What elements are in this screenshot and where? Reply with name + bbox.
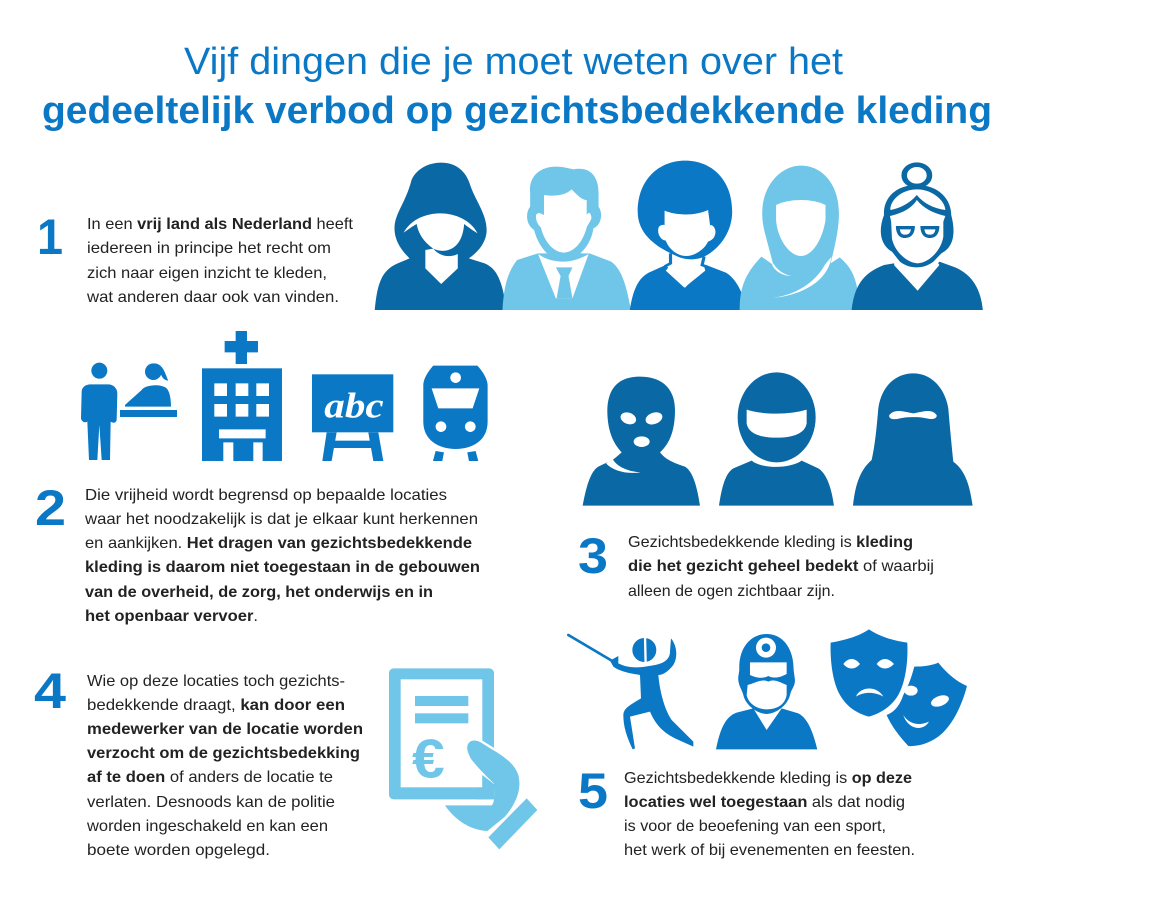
section 4: number: 4 bbox=[34, 663, 66, 719]
person: older woman with glasses bbox=[852, 165, 983, 310]
section 4: text: bedekkende draagt, kan door een bbox=[87, 697, 345, 714]
document: € bbox=[412, 727, 445, 789]
icon: surgeon with mask bbox=[716, 634, 817, 749]
section 4: text: af te doen of anders de locatie te bbox=[87, 769, 333, 786]
person: man in suit bbox=[502, 167, 631, 310]
icon: fencer bbox=[568, 635, 693, 749]
section 1: text: zich naar eigen inzicht te kleden, bbox=[87, 265, 327, 282]
icons: locations bbox=[81, 331, 488, 461]
icon: school blackboard bbox=[312, 374, 393, 461]
icon: balaclava bbox=[583, 377, 700, 506]
section 2: text: van de overheid, de zorg, het onderwijs en in bbox=[85, 584, 433, 601]
section 1: text bbox=[86, 216, 354, 306]
icon: niqab bbox=[853, 373, 973, 506]
section 2: number: 2 bbox=[35, 480, 66, 536]
section 5: text: Gezichtsbedekkende kleding is op deze bbox=[624, 770, 912, 787]
person: hoodie bbox=[375, 163, 506, 310]
section 2: text: het openbaar vervoer . bbox=[85, 608, 258, 625]
section 2: text: Die vrijheid wordt begrensd op bepaalde locaties bbox=[85, 487, 447, 504]
section 4: text: worden ingeschakeld en kan een bbox=[86, 818, 328, 835]
icon: theatre masks bbox=[831, 629, 967, 746]
hand bbox=[445, 740, 537, 849]
section 5: text bbox=[624, 770, 915, 859]
icons: five people bbox=[375, 161, 983, 310]
section 2: text: en aankijken. Het dragen van gezichtsbedekkende bbox=[85, 535, 472, 552]
section 3: text: die het gezicht geheel bedekt of waarbij bbox=[628, 558, 934, 575]
section 4: text: medewerker van de locatie worden bbox=[87, 721, 363, 738]
section 2: text: waar het noodzakelijk is dat je elkaar kunt herkennen bbox=[84, 511, 478, 528]
document bbox=[389, 668, 494, 799]
section 4: text: boete worden opgelegd. bbox=[87, 842, 270, 859]
icons: face coverings bbox=[583, 372, 973, 506]
section 2: text: kleding is daarom niet toegestaan in de gebouwen bbox=[85, 559, 480, 576]
icon: counter with two people bbox=[81, 363, 177, 460]
section 1: text: wat anderen daar ook van vinden. bbox=[86, 289, 339, 306]
icons: allowed exceptions bbox=[568, 629, 967, 749]
title bbox=[42, 41, 992, 132]
icon: hospital bbox=[202, 331, 282, 461]
person: woman with short hair bbox=[630, 161, 746, 310]
section 1: number: 1 bbox=[37, 209, 63, 265]
section 1: text: iedereen in principe het recht om bbox=[87, 240, 331, 257]
section 2: text bbox=[84, 487, 480, 625]
section 3: number: 3 bbox=[578, 528, 608, 584]
title: Vijf dingen die je moet weten over het bbox=[184, 41, 843, 83]
section 5: text: het werk of bij evenementen en feesten. bbox=[624, 842, 915, 859]
section 5: text: locaties wel toegestaan als dat nodig bbox=[624, 794, 905, 811]
section 4: text: verzocht om de gezichtsbedekking bbox=[87, 745, 360, 762]
section 4: text: Wie op deze locaties toch gezichts- bbox=[87, 673, 345, 690]
icon: motorcycle helmet bbox=[719, 372, 834, 506]
title: gedeeltelijk verbod op gezichtsbedekkende kleding bbox=[42, 90, 992, 132]
section 4: text: verlaten. Desnoods kan de politie bbox=[87, 794, 335, 811]
icon: train bbox=[423, 366, 488, 461]
section 3: text bbox=[628, 534, 934, 600]
section 3: text: alleen de ogen zichtbaar zijn. bbox=[628, 583, 835, 600]
person: woman with headscarf bbox=[740, 166, 860, 310]
icon: fine document in hand bbox=[389, 668, 537, 849]
section 1: text: In een vrij land als Nederland heeft bbox=[87, 216, 354, 233]
section 4: text bbox=[86, 673, 363, 859]
section 3: text: Gezichtsbedekkende kleding is kleding bbox=[628, 534, 913, 551]
section 5: number: 5 bbox=[578, 763, 608, 819]
icon: school blackboard: abc bbox=[324, 386, 384, 426]
section 5: text: is voor de beoefening van een sport, bbox=[624, 818, 886, 835]
